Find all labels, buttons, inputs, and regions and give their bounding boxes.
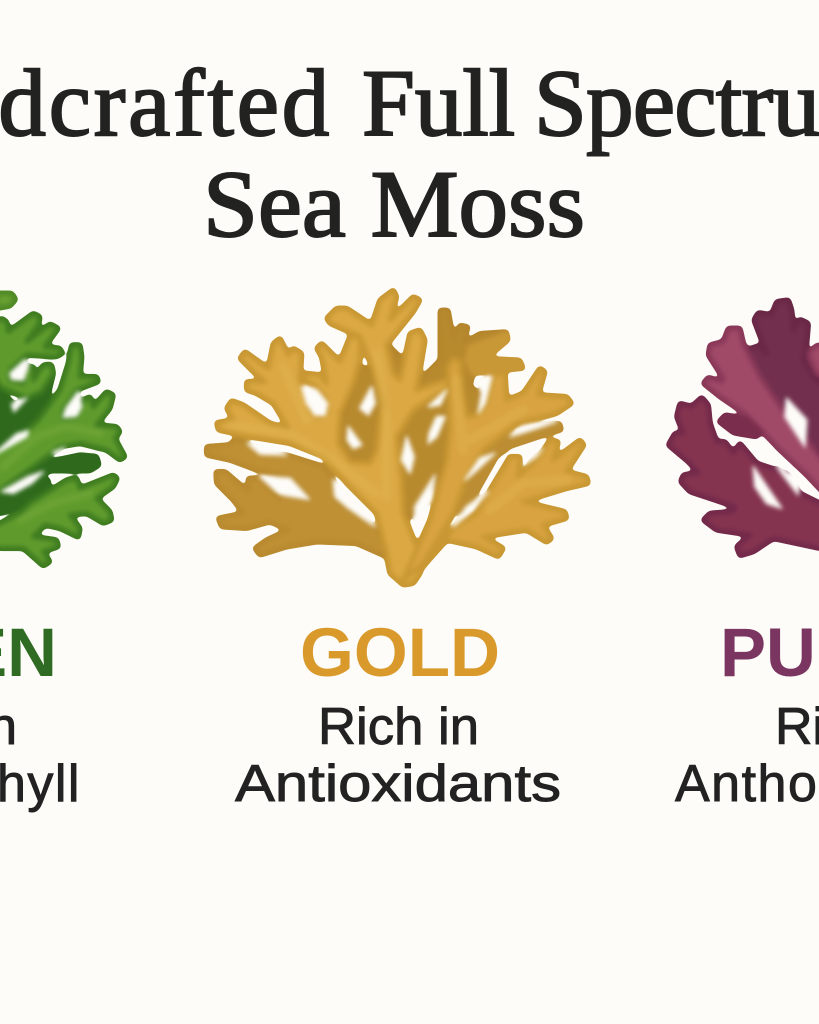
description: gold: Rich in bbox=[318, 698, 479, 756]
description: gold bbox=[235, 698, 561, 813]
label: purple bbox=[675, 614, 819, 813]
title: Full bbox=[362, 50, 515, 156]
title: Sea Moss bbox=[203, 151, 585, 257]
icon: purple sea moss bbox=[668, 300, 819, 556]
label: gold bbox=[235, 614, 561, 813]
label: green bbox=[0, 614, 81, 813]
title bbox=[0, 50, 819, 257]
icon: gold sea moss bbox=[207, 290, 588, 585]
description: gold: Antioxidants bbox=[235, 755, 561, 813]
icon: green sea moss bbox=[0, 293, 125, 566]
label: gold: GOLD bbox=[300, 614, 500, 691]
